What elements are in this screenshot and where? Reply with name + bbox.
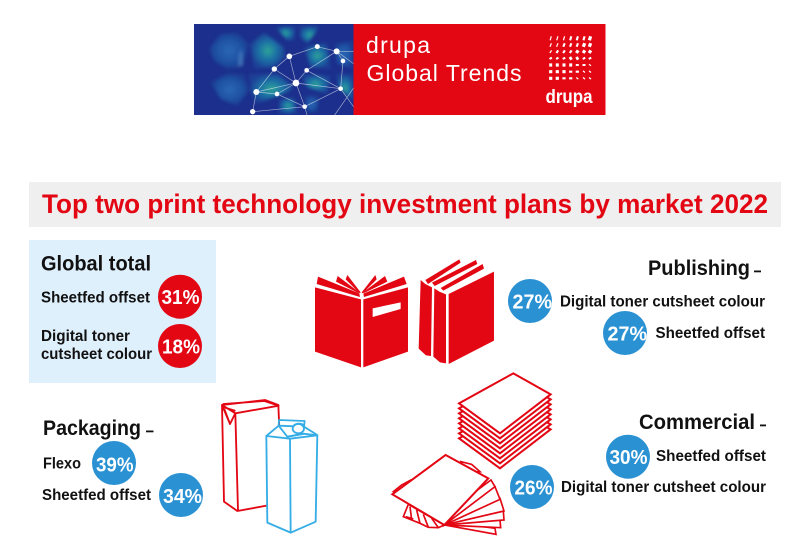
icon: fanned sheets bbox=[392, 455, 504, 534]
badge: 27% sheetfed bbox=[603, 311, 647, 355]
banner: drupa Global Trends bbox=[194, 24, 606, 116]
icon: open book bbox=[315, 275, 408, 367]
commercial section bbox=[510, 410, 767, 509]
icon: paper stacks bbox=[392, 373, 551, 534]
banner heading: drupa bbox=[366, 32, 430, 58]
banner heading bbox=[366, 32, 522, 86]
drupa logo: drupa bbox=[546, 87, 593, 108]
badge: 27% digital bbox=[508, 279, 552, 323]
badge: 34% bbox=[159, 473, 203, 517]
icon: cartons bbox=[222, 400, 317, 533]
badge: 39% bbox=[92, 441, 136, 485]
heading: publishing: Publishing bbox=[648, 256, 750, 280]
label: sheetfed offset: Sheetfed offset bbox=[42, 487, 152, 504]
label: digital toner cutsheet colour: Digital toner cutsheet colour bbox=[561, 479, 766, 496]
packaging section bbox=[42, 416, 203, 517]
label: digital toner cutsheet colour bbox=[41, 328, 152, 363]
label: digital toner cutsheet colour: cutsheet colour bbox=[41, 346, 152, 363]
label: digital toner cutsheet colour: Digital toner cutsheet colour bbox=[560, 294, 765, 311]
drupa logo bbox=[546, 36, 593, 108]
label: flexo: Flexo bbox=[43, 456, 81, 472]
publishing section bbox=[508, 256, 766, 355]
badge: 18% bbox=[158, 324, 202, 368]
badge: 27% sheetfed: 27% bbox=[608, 322, 647, 346]
heading: packaging: Packaging bbox=[43, 416, 141, 440]
icon: books bbox=[315, 259, 494, 367]
icon: red carton bbox=[222, 400, 279, 511]
heading: commercial: Commercial bbox=[639, 410, 755, 434]
badge: 31%: 31% bbox=[162, 286, 200, 309]
badge: 27% digital: 27% bbox=[512, 290, 552, 313]
icon: blue carton bbox=[266, 420, 317, 533]
banner red panel bbox=[354, 24, 606, 115]
banner heading: Global Trends bbox=[366, 60, 522, 86]
badge: 26% bbox=[510, 465, 554, 509]
label: sheetfed offset: Sheetfed offset bbox=[41, 290, 151, 306]
label: digital toner cutsheet colour: Digital toner bbox=[41, 328, 130, 345]
heading: global total: Global total bbox=[41, 252, 151, 276]
icon: standing books bbox=[419, 259, 494, 364]
badge: 18%: 18% bbox=[162, 336, 200, 358]
label: sheetfed offset: Sheetfed offset bbox=[656, 325, 766, 342]
badge: 39%: 39% bbox=[96, 454, 134, 476]
panel: global total bbox=[29, 240, 216, 383]
badge: 34%: 34% bbox=[163, 485, 202, 508]
label: sheetfed offset: Sheetfed offset bbox=[656, 448, 767, 465]
title bar: Top two print technology investment plans by market 2022 bbox=[42, 189, 768, 219]
banner image: blue network panel bbox=[194, 24, 354, 116]
title bar bbox=[29, 182, 781, 227]
badge: 31% bbox=[158, 275, 202, 319]
icon: squared stack of sheets bbox=[459, 373, 551, 468]
badge: 26%: 26% bbox=[514, 476, 552, 499]
badge: 30% bbox=[606, 435, 650, 479]
badge: 30%: 30% bbox=[610, 446, 648, 469]
